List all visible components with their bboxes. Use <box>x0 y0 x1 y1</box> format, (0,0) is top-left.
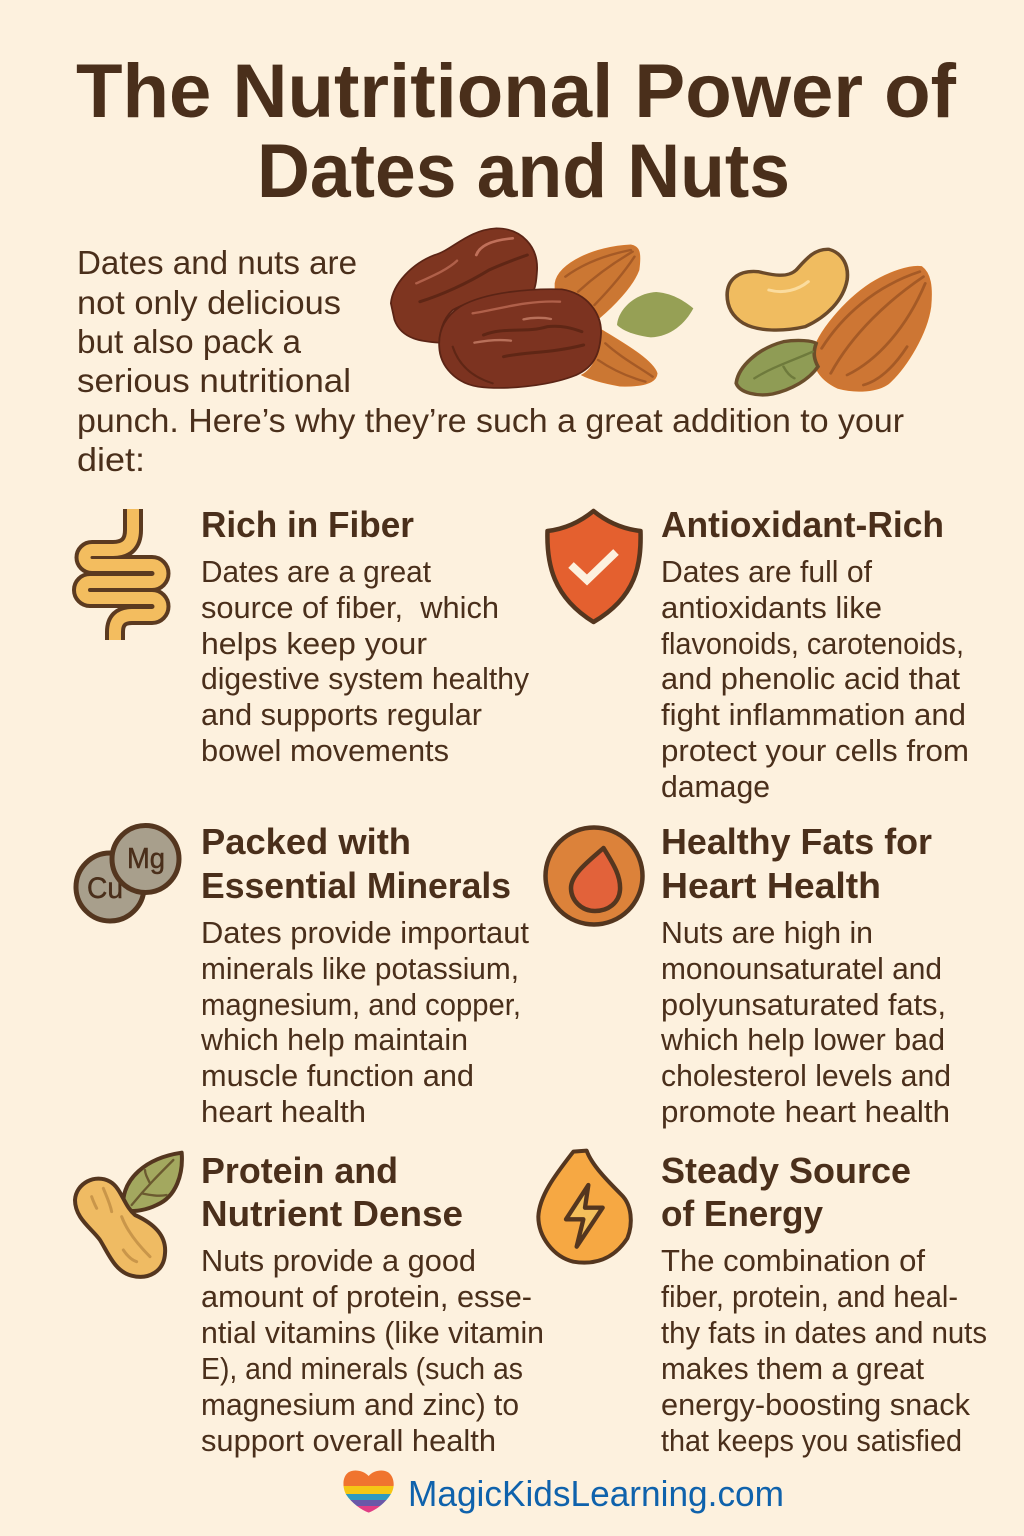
body text <box>660 915 951 1129</box>
icon: energy drop <box>538 1151 631 1263</box>
body text <box>661 1243 987 1458</box>
body text: and phenolic acid that <box>661 661 960 696</box>
intro text: serious nutritional <box>77 362 351 399</box>
big almond <box>813 266 931 391</box>
body text: bowel movements <box>201 733 449 768</box>
body text <box>661 554 969 804</box>
intro text <box>77 244 904 478</box>
intro text: diet: <box>77 441 145 478</box>
illustration: dates and nuts <box>391 228 931 395</box>
body text <box>200 915 529 1129</box>
body text: thy fats in dates and nuts <box>661 1315 987 1350</box>
almond behind dates top <box>555 245 640 317</box>
body text: fight inflammation and <box>661 697 966 732</box>
intro text: but also pack a <box>77 323 302 360</box>
body text: helps keep your <box>201 626 427 661</box>
heading: Nutrient Dense <box>201 1193 463 1234</box>
heading: of Energy <box>661 1193 823 1234</box>
body text: cholesterol levels and <box>661 1058 951 1093</box>
body text: Dates are full of <box>661 554 872 589</box>
icon: oil drop <box>546 828 642 924</box>
heading <box>661 821 932 906</box>
heading <box>201 1150 463 1234</box>
panel: steady source of energy <box>538 1150 987 1458</box>
date front <box>439 289 601 388</box>
heading: Steady Source <box>661 1150 911 1191</box>
title: The Nutritional Power of <box>76 49 957 134</box>
icon: peanut and leaf <box>75 1153 182 1277</box>
body text: magnesium, and copper, <box>201 987 521 1022</box>
body text: source of fiber, which <box>201 590 499 625</box>
date back <box>391 228 537 343</box>
heading <box>201 821 511 906</box>
intro text: not only delicious <box>77 284 341 321</box>
panel: protein and nutrient dense <box>75 1150 544 1458</box>
body text: promote heart health <box>661 1094 950 1129</box>
body text: which help maintain <box>200 1022 468 1057</box>
body text: fiber, protein, and heal- <box>661 1279 958 1314</box>
icon: mineral coins <box>76 826 179 921</box>
body text: antioxidants like <box>661 590 882 625</box>
body text: which help lower bad <box>660 1022 945 1057</box>
body text <box>201 554 529 768</box>
body text: protect your cells from <box>661 733 969 768</box>
body text: heart health <box>201 1094 366 1129</box>
icon: intestine <box>82 509 160 640</box>
heading: Antioxidant-Rich <box>661 504 944 545</box>
body text: minerals like potassium, <box>201 951 519 986</box>
body text: Nuts provide a good <box>201 1243 476 1278</box>
heading: Protein and <box>201 1150 398 1191</box>
body text: and supports regular <box>201 697 482 732</box>
heading: Essential Minerals <box>201 865 511 906</box>
website name: MagicKidsLearning.com <box>408 1473 784 1514</box>
panel: healthy fats <box>546 821 951 1129</box>
body text: monounsaturatel and <box>661 951 942 986</box>
body text: E), and minerals (such as <box>201 1351 523 1386</box>
body text: The combination of <box>661 1243 925 1278</box>
body text: makes them a great <box>661 1351 924 1386</box>
body text: flavonoids, carotenoids, <box>661 626 964 661</box>
almond below dates <box>582 330 657 386</box>
icon: shield <box>547 511 641 622</box>
body text: digestive system healthy <box>201 661 529 696</box>
body text: magnesium and zinc) to <box>201 1387 519 1422</box>
body text: damage <box>661 769 770 804</box>
heading: Rich in Fiber <box>201 504 414 545</box>
body text: Nuts are high in <box>661 915 873 950</box>
green seed <box>617 292 693 337</box>
body text: Dates provide importaut <box>201 915 529 950</box>
body text: that keeps you satisfied <box>661 1423 962 1458</box>
icon: rainbow heart <box>343 1470 394 1512</box>
icon: mineral coins: Mg <box>127 843 165 875</box>
body text: polyunsaturated fats, <box>661 987 946 1022</box>
body text: energy-boosting snack <box>661 1387 970 1422</box>
icon: mineral coins: Cu <box>87 872 123 905</box>
body text: Dates are a great <box>201 554 431 589</box>
title <box>76 49 957 214</box>
panel: rich in fiber <box>82 504 529 768</box>
intro text: Dates and nuts are <box>77 244 357 281</box>
cashew <box>727 249 847 330</box>
body text: support overall health <box>201 1423 496 1458</box>
footer brand <box>343 1470 782 1514</box>
heading: Heart Health <box>661 865 881 906</box>
body text: muscle function and <box>201 1058 474 1093</box>
pumpkin seed <box>736 340 818 395</box>
title: Dates and Nuts <box>257 129 790 214</box>
body text <box>201 1243 544 1458</box>
intro text: punch. Here’s why they’re such a great addition to your <box>77 402 904 439</box>
heading: Packed with <box>201 821 411 862</box>
heading: Healthy Fats for <box>661 821 932 862</box>
heading <box>661 1150 911 1234</box>
panel: essential minerals <box>76 821 529 1129</box>
panel: antioxidant-rich <box>547 504 969 804</box>
body text: ntial vitamins (like vitamin <box>201 1315 544 1350</box>
body text: amount of protein, esse- <box>201 1279 532 1314</box>
